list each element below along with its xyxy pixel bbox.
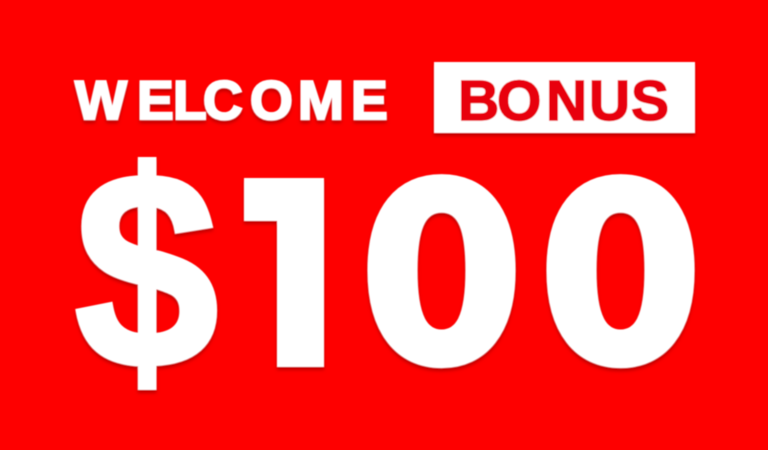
amount: $100: 0: [358, 70, 525, 436]
heading: welcome: WELCOME: [75, 69, 388, 131]
amount: $100: [74, 156, 696, 395]
badge: bonus: BONUS: [458, 69, 669, 133]
amount: $100: 1: [205, 166, 383, 397]
banner: welcome bonus $100: [72, 61, 697, 395]
amount: $100: $: [75, 114, 218, 426]
amount: $100: 0: [537, 70, 704, 436]
